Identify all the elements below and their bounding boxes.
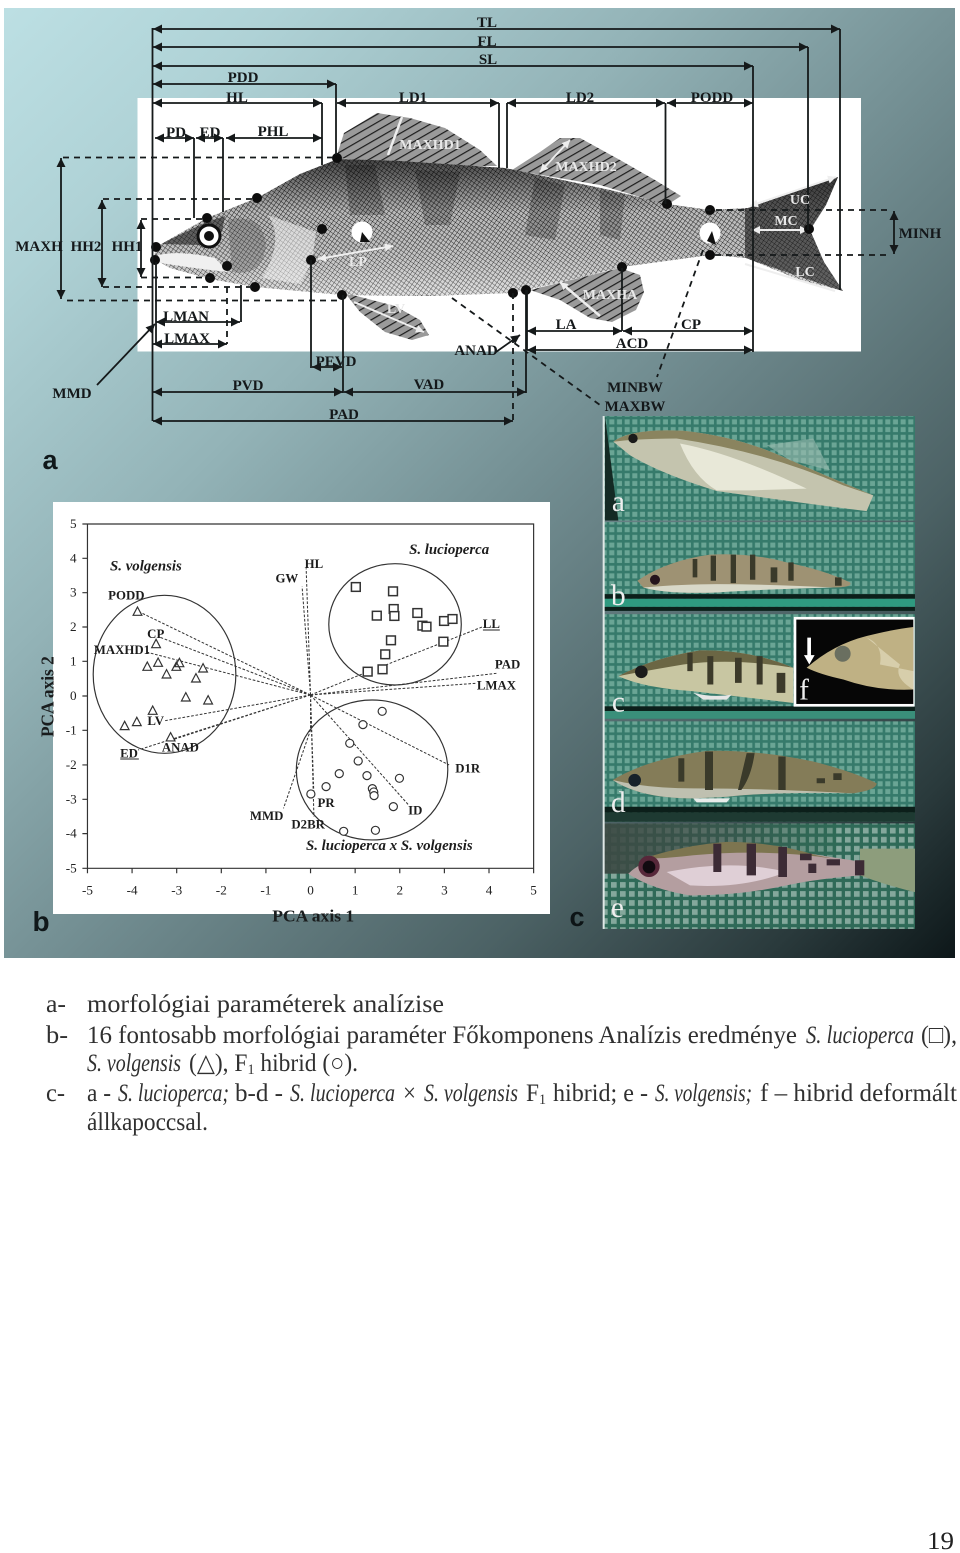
axis numbers: 3: [441, 882, 448, 897]
species labels: S. lucioperca: [409, 542, 490, 558]
axis numbers: [66, 516, 537, 897]
ventral fin: [345, 293, 429, 340]
landmark dots: [150, 153, 814, 300]
panel a: measurement labels: MAXHD2: [555, 160, 617, 175]
photo d: [603, 721, 915, 822]
variable labels: LL: [483, 617, 500, 631]
axis titles: PCA axis 2: [37, 656, 57, 737]
caption line c second row: állkapoccsal.: [87, 1109, 208, 1136]
panel letter a: a: [42, 445, 58, 475]
panel a: white backing for fish diagram: [138, 98, 861, 352]
photo c: [603, 614, 915, 719]
panel a: measurement labels: PAD: [329, 407, 359, 423]
variable labels: D1R: [455, 762, 481, 776]
panel b: PCA chart: [37, 516, 537, 926]
panel a: measurement labels: ED: [200, 125, 221, 141]
caption line c first row: S. lucioperca: [290, 1080, 395, 1107]
panel a: measurement labels: LD1: [399, 90, 427, 106]
axis titles: PCA axis 1: [272, 906, 354, 926]
caption line b second row: (△), F: [189, 1050, 251, 1077]
panel a: measurement labels: ACD: [616, 336, 648, 352]
axis numbers: -4: [127, 882, 138, 897]
axis numbers: -5: [66, 860, 77, 875]
variable labels: ID: [408, 804, 422, 818]
panel a: measurement labels: MAXH: [15, 239, 63, 255]
photo e: e: [611, 892, 624, 924]
panel a: measurement labels: MAXBW: [605, 399, 665, 415]
panel a: measurement labels: LV: [387, 302, 405, 317]
eye: [198, 225, 220, 247]
variable labels: MMD: [250, 809, 283, 823]
species labels: S. lucioperca x S. volgensis: [306, 838, 473, 854]
panel a: measurement lines: [61, 28, 894, 421]
body-width marker circles: [352, 222, 372, 242]
variable labels: CP: [147, 627, 165, 641]
panel b: white chart card: [53, 502, 550, 914]
axis numbers: -3: [171, 882, 183, 897]
panel a: measurement labels: LMAX: [164, 331, 210, 347]
variable labels: HL: [305, 557, 323, 571]
species labels: S. volgensis: [110, 559, 182, 575]
photo d: d: [611, 787, 626, 819]
panel a: measurement labels: PDD: [228, 70, 259, 86]
caption line a: morfológiai paraméterek analízise: [87, 991, 444, 1018]
fin arrows: [318, 246, 393, 259]
variable labels: MAXHD1: [94, 643, 150, 657]
species labels: [110, 542, 490, 854]
caption line c first row: f – hibrid deformált: [760, 1080, 957, 1107]
inset f: deformed jaw: [794, 617, 915, 707]
variable labels: D2BR: [291, 818, 326, 832]
panel a: measurement labels: MAXHD1: [399, 138, 461, 153]
panel a: measurement labels: HL: [226, 90, 248, 106]
caption: [46, 991, 957, 1136]
panel a: measurement labels: LMAN: [163, 309, 209, 325]
axis numbers: 5: [70, 516, 77, 531]
caption line c first row: c-: [46, 1080, 65, 1107]
photo a: [603, 416, 915, 520]
caption line b second row: S. volgensis: [87, 1050, 181, 1077]
axis titles: [37, 656, 354, 926]
axis numbers: 3: [70, 585, 77, 600]
axis numbers: -5: [82, 882, 93, 897]
photo e: [603, 823, 915, 929]
caption line c first row: S. volgensis;: [655, 1080, 752, 1107]
axis numbers: 1: [352, 882, 358, 897]
axis numbers: 1: [70, 653, 77, 668]
panel a: measurement labels: HH1: [112, 239, 142, 255]
panel a: measurement labels: MAXHA: [583, 288, 638, 303]
variable labels: LV: [147, 714, 165, 728]
axis numbers: 4: [70, 550, 77, 565]
panel a: measurement labels: PEVD: [316, 354, 357, 370]
caption line b second row: [87, 1050, 358, 1078]
photo b: [603, 522, 915, 612]
axis numbers: 0: [70, 688, 77, 703]
axis numbers: 4: [486, 882, 493, 897]
panel a: measurement labels: LC: [795, 265, 815, 280]
caption line c first row: hibrid; e -: [553, 1080, 648, 1107]
S. volgensis triangles: [120, 607, 213, 741]
panel a: measurement labels: VAD: [414, 377, 444, 393]
panel a: measurement labels: MINH: [899, 226, 942, 242]
panel a: measurement labels: PVD: [233, 378, 264, 394]
panel a: measurement labels: LA: [556, 317, 577, 333]
panel a: measurement labels: HH2: [71, 239, 101, 255]
panel c: fish photographs: [603, 416, 915, 929]
axis numbers: 5: [530, 882, 537, 897]
panel a: measurement labels: CP: [681, 317, 701, 333]
photo b: b: [611, 580, 626, 612]
loading vectors: [137, 568, 496, 817]
photo strip left edge: [603, 416, 605, 929]
panel a: fish drawing: [150, 113, 850, 340]
caption line c first row: F: [526, 1080, 540, 1107]
panel a: measurement labels: MC: [774, 214, 798, 229]
panel: figure background: [4, 8, 955, 958]
axis numbers: -4: [66, 826, 77, 841]
axis numbers: 2: [70, 619, 77, 634]
anal fin: [530, 268, 644, 322]
panel a: measurement labels: ANAD: [454, 343, 498, 359]
axis numbers: 2: [396, 882, 403, 897]
axis numbers: -2: [66, 757, 77, 772]
panel a: measurement labels: PODD: [691, 90, 733, 106]
caption line c first row: S. volgensis: [424, 1080, 518, 1107]
S. lucioperca squares: [351, 583, 457, 676]
photo c: c: [612, 686, 625, 718]
variable labels: GW: [275, 572, 299, 586]
axis numbers: -1: [260, 882, 271, 897]
panel a: measurement labels: UC: [790, 193, 810, 208]
axis numbers: 0: [307, 882, 314, 897]
hybrid circles: [307, 707, 403, 835]
variable labels: PODD: [108, 588, 145, 602]
caption line c first row: a -: [87, 1080, 111, 1107]
caption line c first row: 1: [539, 1092, 546, 1108]
caption line b first row: (□),: [921, 1022, 957, 1049]
group ellipses: [93, 564, 461, 840]
caption line b second row: hibrid (○).: [255, 1050, 358, 1077]
variable labels: PAD: [495, 658, 520, 672]
second dorsal fin: [512, 138, 681, 205]
variable labels: ANAD: [162, 740, 199, 754]
panel a: measurement labels: TL: [477, 15, 497, 31]
photo a: a: [612, 486, 625, 518]
panel a: measurement labels: SL: [479, 52, 497, 68]
caption line c first row: S. lucioperca;: [118, 1080, 229, 1107]
panel a: measurement labels: [15, 15, 942, 423]
caption line c first row: b-d -: [235, 1080, 283, 1107]
panel a: measurement labels: FL: [477, 34, 497, 50]
panel a: measurement labels: LP: [349, 255, 367, 270]
axis numbers: -2: [216, 882, 227, 897]
panel a: measurement labels: PHL: [258, 124, 288, 140]
variable labels: PR: [318, 796, 335, 810]
panel letter c: c: [569, 902, 585, 932]
variable labels: ED: [120, 746, 138, 760]
panel a: measurement labels: MINBW: [607, 380, 663, 396]
panel a: measurement labels: LD2: [566, 90, 594, 106]
caption line b first row: S. lucioperca: [806, 1022, 914, 1049]
caption line b first row: b-: [46, 1022, 68, 1049]
caption line b first row: 16 fontosabb morfológiai paraméter Főkomponens Analízis eredménye: [87, 1022, 797, 1049]
axis numbers: -3: [66, 791, 77, 806]
panel letter b: b: [32, 906, 50, 937]
plot frame and ticks: [82, 524, 534, 873]
caption line c first row: ×: [403, 1080, 416, 1107]
variable labels: LMAX: [477, 678, 517, 692]
caption line c first row: [46, 1080, 957, 1108]
axis numbers: -1: [66, 722, 77, 737]
caption line b second row: 1: [247, 1062, 255, 1078]
caption line a: a-: [46, 991, 66, 1018]
body and tail: [154, 159, 843, 296]
variable labels: [94, 557, 520, 832]
panel a: measurement labels: MMD: [52, 386, 92, 402]
inset f: deformed jaw: f: [799, 674, 809, 706]
panel a: measurement labels: PD: [166, 125, 186, 141]
first dorsal fin: [336, 113, 497, 166]
